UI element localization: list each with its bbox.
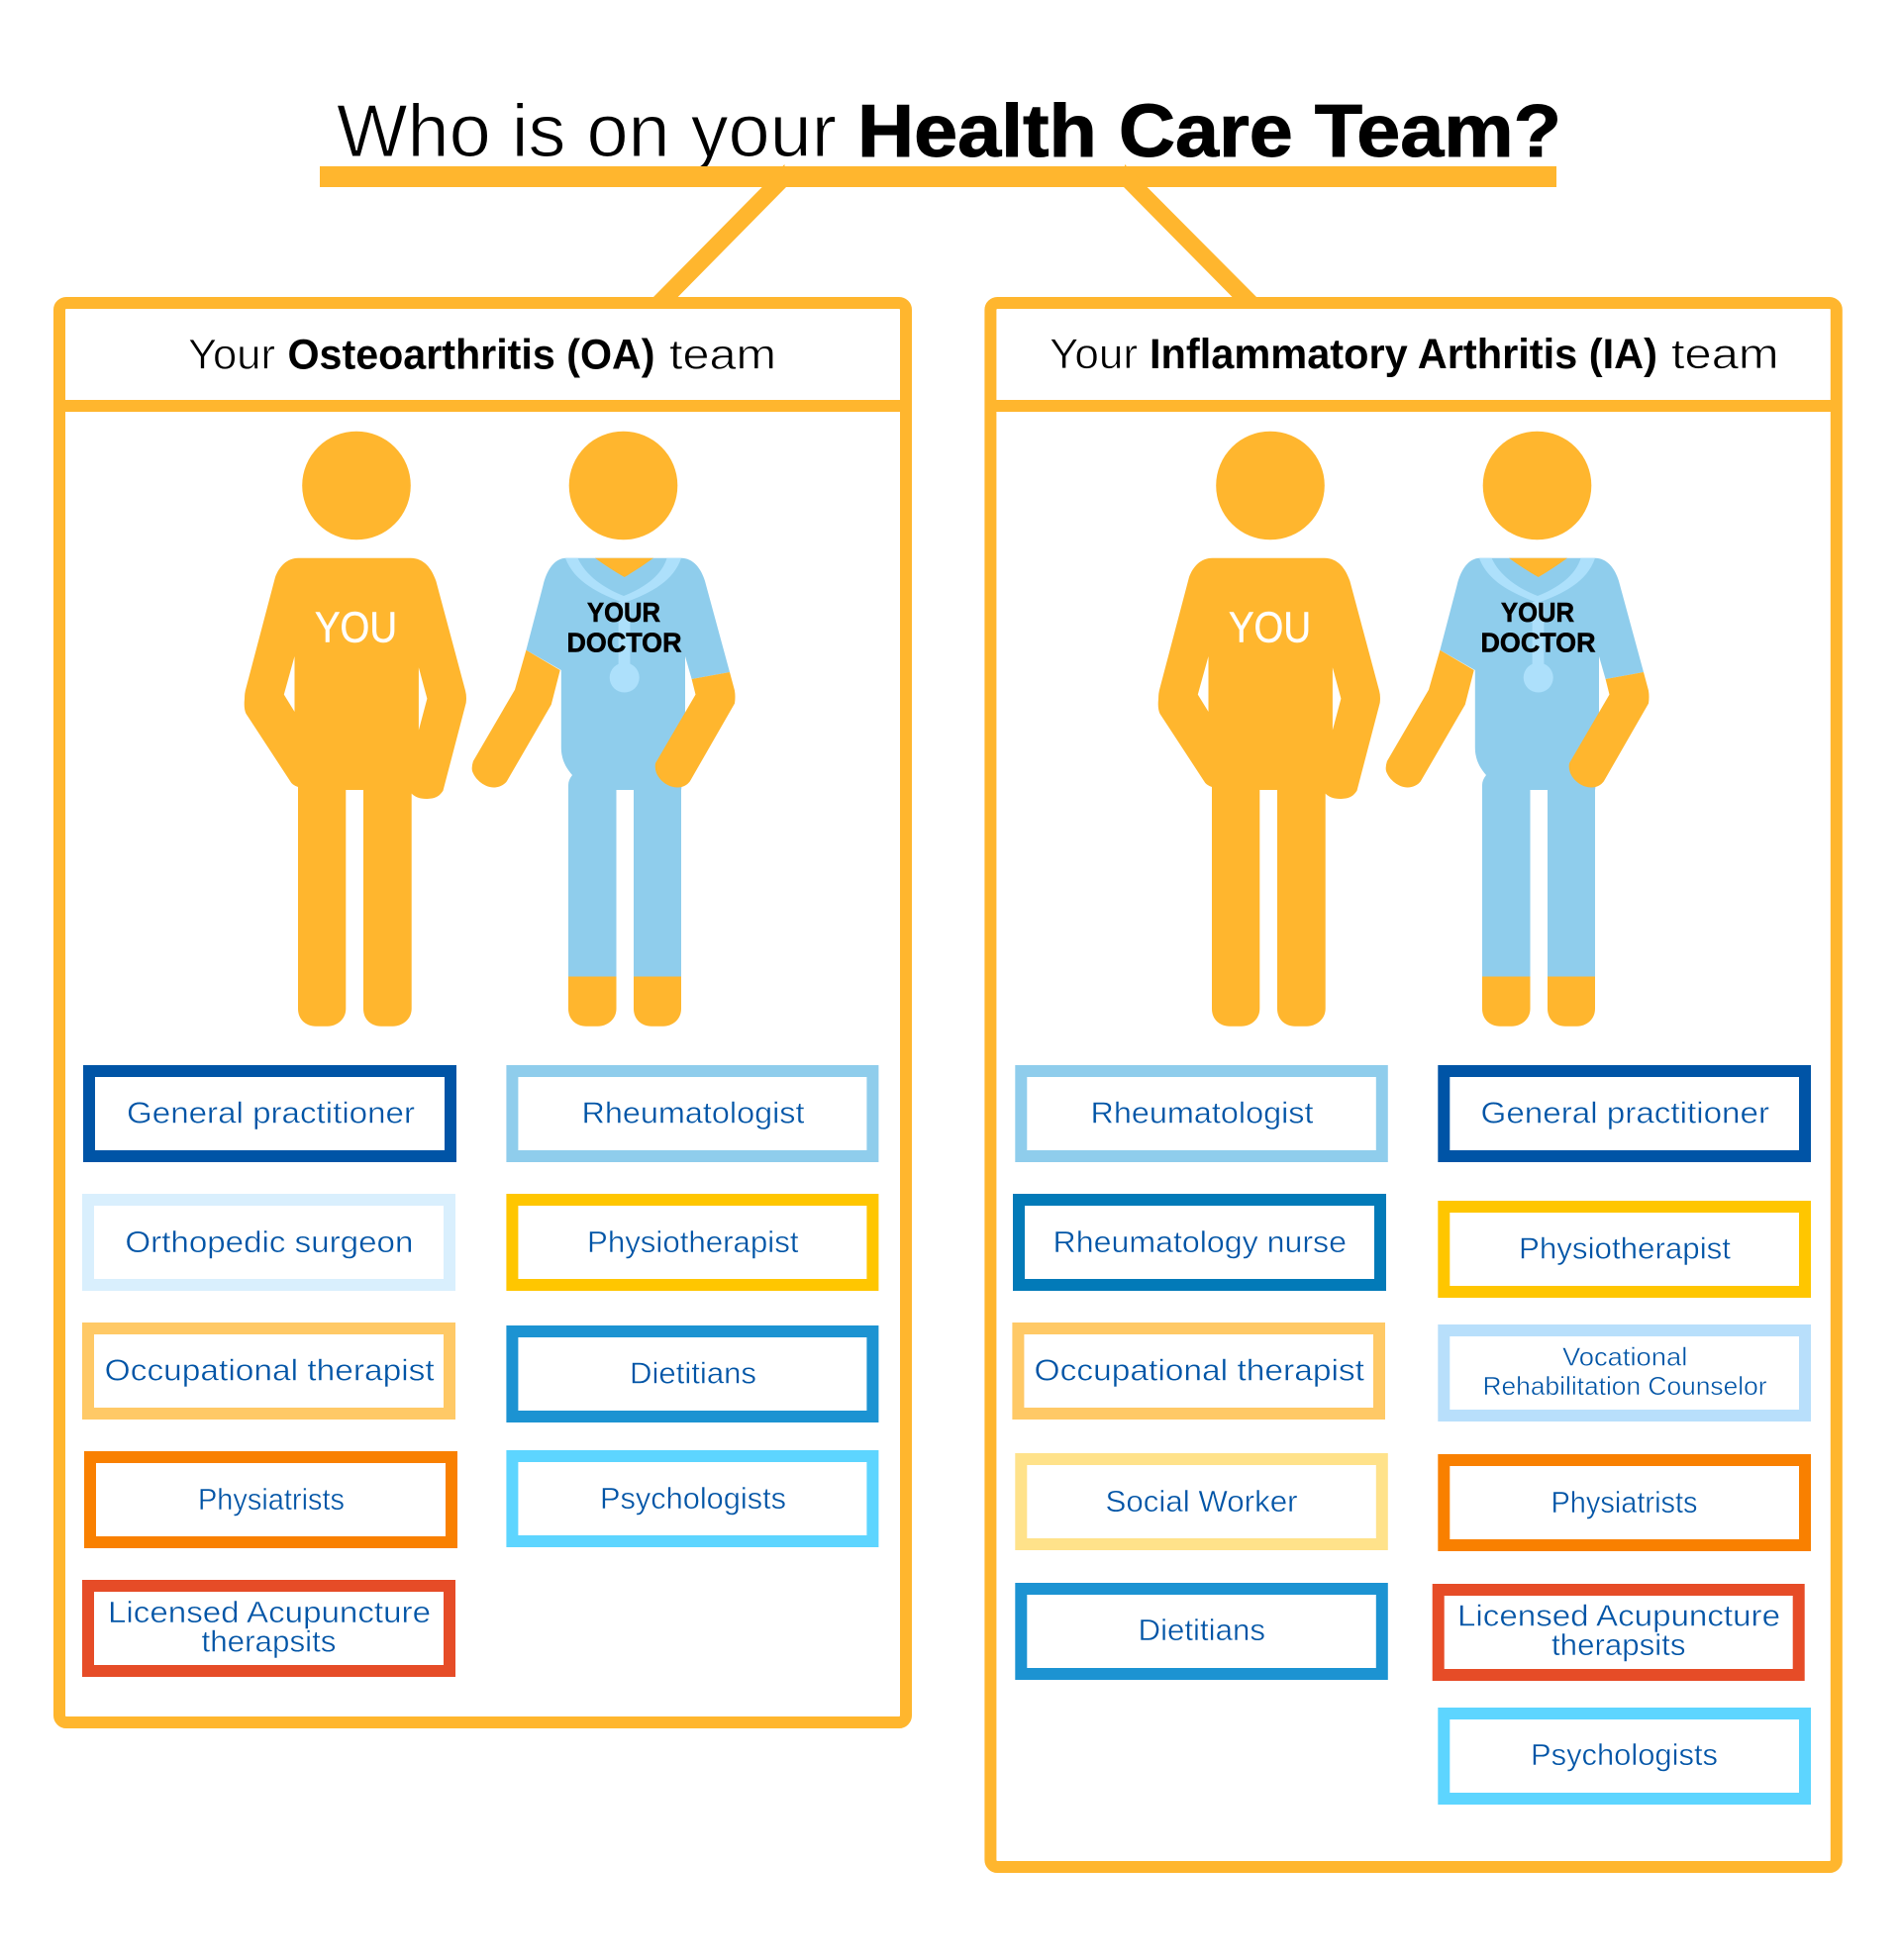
- box: dietitians: Dietitians: [1139, 1613, 1265, 1647]
- box: physiatrists: Physiatrists: [198, 1482, 345, 1517]
- figure: your doctor: DOCTOR: [1481, 628, 1596, 657]
- figure: your doctor: YOUR: [1501, 597, 1574, 628]
- title: Health Care Team?: [857, 89, 1561, 172]
- heading: IA team: Inflammatory Arthritis (IA): [1150, 331, 1657, 378]
- box: licensed acupuncture therapsits: Licensed Acupuncture: [108, 1595, 431, 1629]
- box: physiotherapist: [512, 1200, 872, 1285]
- box: physiotherapist: Physiotherapist: [587, 1225, 799, 1259]
- figure: your doctor: [472, 432, 735, 1027]
- heading: IA team: Your: [1050, 331, 1138, 378]
- box: orthopedic surgeon: [88, 1200, 450, 1285]
- box: vocational rehabilitation counselor: Vocational: [1562, 1342, 1687, 1372]
- box: occupational therapist: [1018, 1328, 1379, 1414]
- box: dietitians: Dietitians: [630, 1356, 756, 1390]
- figure: you: YOU: [315, 604, 397, 651]
- box: occupational therapist: Occupational therapist: [1034, 1352, 1364, 1388]
- box: psychologists: [1444, 1714, 1805, 1799]
- box: orthopedic surgeon: Orthopedic surgeon: [125, 1225, 413, 1259]
- box: general practitioner: General practitioner: [127, 1095, 415, 1130]
- box: rheumatology nurse: [1019, 1200, 1380, 1285]
- box: dietitians: [1021, 1589, 1382, 1674]
- box: vocational rehabilitation counselor: Rehabilitation Counselor: [1483, 1371, 1767, 1401]
- figure: your doctor: [1386, 432, 1650, 1027]
- box: psychologists: [512, 1456, 872, 1541]
- box: general practitioner: [89, 1071, 450, 1156]
- box: psychologists: Psychologists: [1531, 1737, 1718, 1772]
- figure: your doctor: DOCTOR: [566, 628, 681, 657]
- box: occupational therapist: Occupational therapist: [105, 1352, 435, 1388]
- box: rheumatologist: Rheumatologist: [582, 1095, 805, 1130]
- box: licensed acupuncture therapsits: [88, 1586, 450, 1671]
- box: physiotherapist: [1444, 1207, 1805, 1292]
- box: rheumatologist: Rheumatologist: [1091, 1095, 1314, 1130]
- heading: OA team: Osteoarthritis (OA): [287, 331, 655, 378]
- box: rheumatologist: [512, 1071, 872, 1156]
- figure: you: YOU: [1229, 604, 1311, 651]
- box: licensed acupuncture therapsits: therapsits: [202, 1623, 337, 1659]
- box: licensed acupuncture therapsits: Licensed Acupuncture: [1457, 1598, 1780, 1633]
- box: physiatrists: [1444, 1460, 1805, 1545]
- box: general practitioner: General practitioner: [1481, 1095, 1769, 1130]
- figure: you: [245, 432, 466, 1027]
- box: dietitians: [512, 1331, 872, 1417]
- box: general practitioner: [1444, 1071, 1805, 1156]
- box: occupational therapist: [88, 1328, 450, 1414]
- heading: OA team: [188, 331, 776, 378]
- title: [337, 89, 1561, 172]
- box: social worker: [1021, 1459, 1382, 1544]
- figure: you: [1158, 432, 1380, 1027]
- box: physiotherapist: Physiotherapist: [1519, 1231, 1731, 1265]
- box: physiatrists: [90, 1457, 451, 1542]
- box: licensed acupuncture therapsits: [1439, 1590, 1799, 1675]
- title underline bar with connectors: [320, 164, 1556, 297]
- box: physiatrists: Physiatrists: [1551, 1485, 1697, 1519]
- heading: IA team: team: [1671, 331, 1778, 378]
- heading: OA team: Your: [188, 331, 275, 378]
- box: psychologists: Psychologists: [600, 1481, 786, 1516]
- box: rheumatology nurse: Rheumatology nurse: [1053, 1225, 1347, 1259]
- title: Who is on your: [337, 89, 837, 172]
- panel: osteoarthritis team: [59, 303, 906, 1722]
- box: vocational rehabilitation counselor: [1444, 1330, 1805, 1416]
- box: rheumatologist: [1021, 1071, 1382, 1156]
- box: licensed acupuncture therapsits: therapsits: [1551, 1627, 1685, 1662]
- box: social worker: Social Worker: [1105, 1484, 1297, 1519]
- figure: your doctor: YOUR: [587, 597, 660, 628]
- panel: inflammatory arthritis team: [990, 303, 1837, 1867]
- heading: OA team: team: [669, 331, 776, 378]
